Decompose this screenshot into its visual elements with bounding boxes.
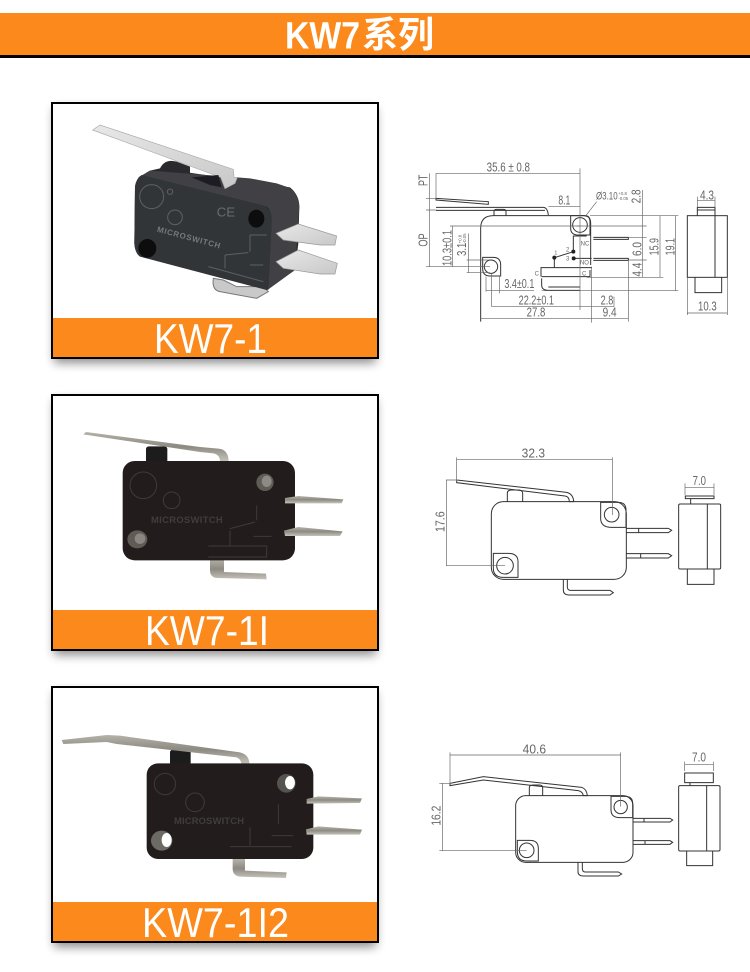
- dimension labels: 32.3: [522, 446, 545, 460]
- dimension labels: 16.2: [430, 806, 444, 826]
- dimension labels: 40.6: [523, 742, 546, 756]
- dimension labels: 6.0: [630, 242, 644, 256]
- dimension labels: 4.4: [630, 263, 644, 277]
- panel: KW7-1 technical drawing: [416, 161, 727, 323]
- panel: KW7-1I2 product card: [52, 687, 378, 947]
- outline drawing: [457, 480, 672, 595]
- label band: KW7-1I: [53, 607, 377, 654]
- dimension labels: 3.4±0.1: [504, 277, 534, 291]
- side view: [679, 483, 721, 584]
- dimension labels: 10.3: [698, 300, 717, 314]
- dimension labels: 1: [554, 250, 557, 256]
- dimension labels: 7.0: [693, 474, 706, 488]
- title: 系列: [362, 14, 434, 55]
- dimension labels: 3.1: [455, 243, 469, 256]
- photo: KW7-1 switch: [93, 125, 337, 298]
- label band: KW7-1I: KW7-1I: [145, 607, 269, 654]
- dimension labels: 2.8: [630, 189, 644, 203]
- dimension labels: 2: [566, 247, 570, 253]
- panel: KW7-1I product card: [52, 395, 378, 655]
- label band: KW7-1: [53, 315, 377, 362]
- outline drawing: [450, 777, 673, 876]
- photo: KW7-1 switch: CE: [217, 205, 235, 220]
- dimension labels: -0.05: [618, 196, 629, 201]
- dimension labels: 19.1: [663, 238, 677, 255]
- label band: KW7-1I2: [53, 899, 377, 946]
- dimension labels: 2.8: [601, 294, 613, 308]
- dimension labels: +0.8: [618, 191, 627, 196]
- photo: KW7-1I2 switch: [62, 735, 362, 878]
- outline drawing: [436, 198, 628, 322]
- dimension labels: PT: [416, 174, 430, 186]
- dimension labels: 17.6: [434, 511, 448, 532]
- dimension labels: [430, 742, 706, 826]
- dimension labels: 35.6 ± 0.8: [487, 161, 530, 175]
- dimension lines: [439, 752, 621, 851]
- dimension labels: 15.9: [647, 238, 661, 255]
- label band: KW7-1I2: KW7-1I2: [142, 899, 289, 946]
- panel: KW7-1 product card: [52, 103, 378, 363]
- dimension labels: 4.3: [700, 188, 714, 202]
- dimension labels: 3: [566, 257, 570, 263]
- dimension labels: 8.1: [558, 193, 570, 207]
- dimension labels: 7.0: [692, 751, 706, 765]
- header banner: [0, 13, 750, 58]
- dimension labels: Ø3.10: [596, 190, 618, 202]
- dimension labels: OP: [416, 233, 430, 247]
- dimension labels: C: [582, 271, 587, 277]
- title: KW7: [285, 16, 360, 58]
- dimension labels: C: [535, 271, 540, 277]
- photo: KW7-1 switch: MICROSWITCH: [156, 225, 221, 250]
- photo: KW7-1I2 switch: MICROSWITCH: [174, 816, 244, 826]
- dimension labels: 27.8: [527, 305, 545, 319]
- dimension labels: NO: [580, 260, 589, 266]
- dimension labels: 10.3±0.1: [441, 230, 455, 266]
- dimension labels: [434, 446, 706, 532]
- panel: KW7-1I technical drawing: [434, 446, 721, 595]
- dimension labels: [416, 161, 717, 319]
- dimension labels: +0.8: [458, 234, 463, 243]
- dimension labels: 9.4: [603, 305, 617, 319]
- dimension labels: 22.2±0.1: [519, 294, 554, 308]
- photo: KW7-1I switch: MICROSWITCH: [151, 515, 223, 525]
- dimension labels: NC: [581, 242, 590, 248]
- label band: KW7-1: KW7-1: [154, 315, 267, 362]
- side view: [679, 762, 720, 866]
- dimension lines: [426, 168, 678, 323]
- photo: KW7-1I switch: [83, 432, 343, 579]
- dimension labels: -0.05: [462, 233, 467, 243]
- dimension lines: [446, 457, 612, 566]
- panel: KW7-1I2 technical drawing: [430, 742, 720, 876]
- side view: [687, 197, 727, 315]
